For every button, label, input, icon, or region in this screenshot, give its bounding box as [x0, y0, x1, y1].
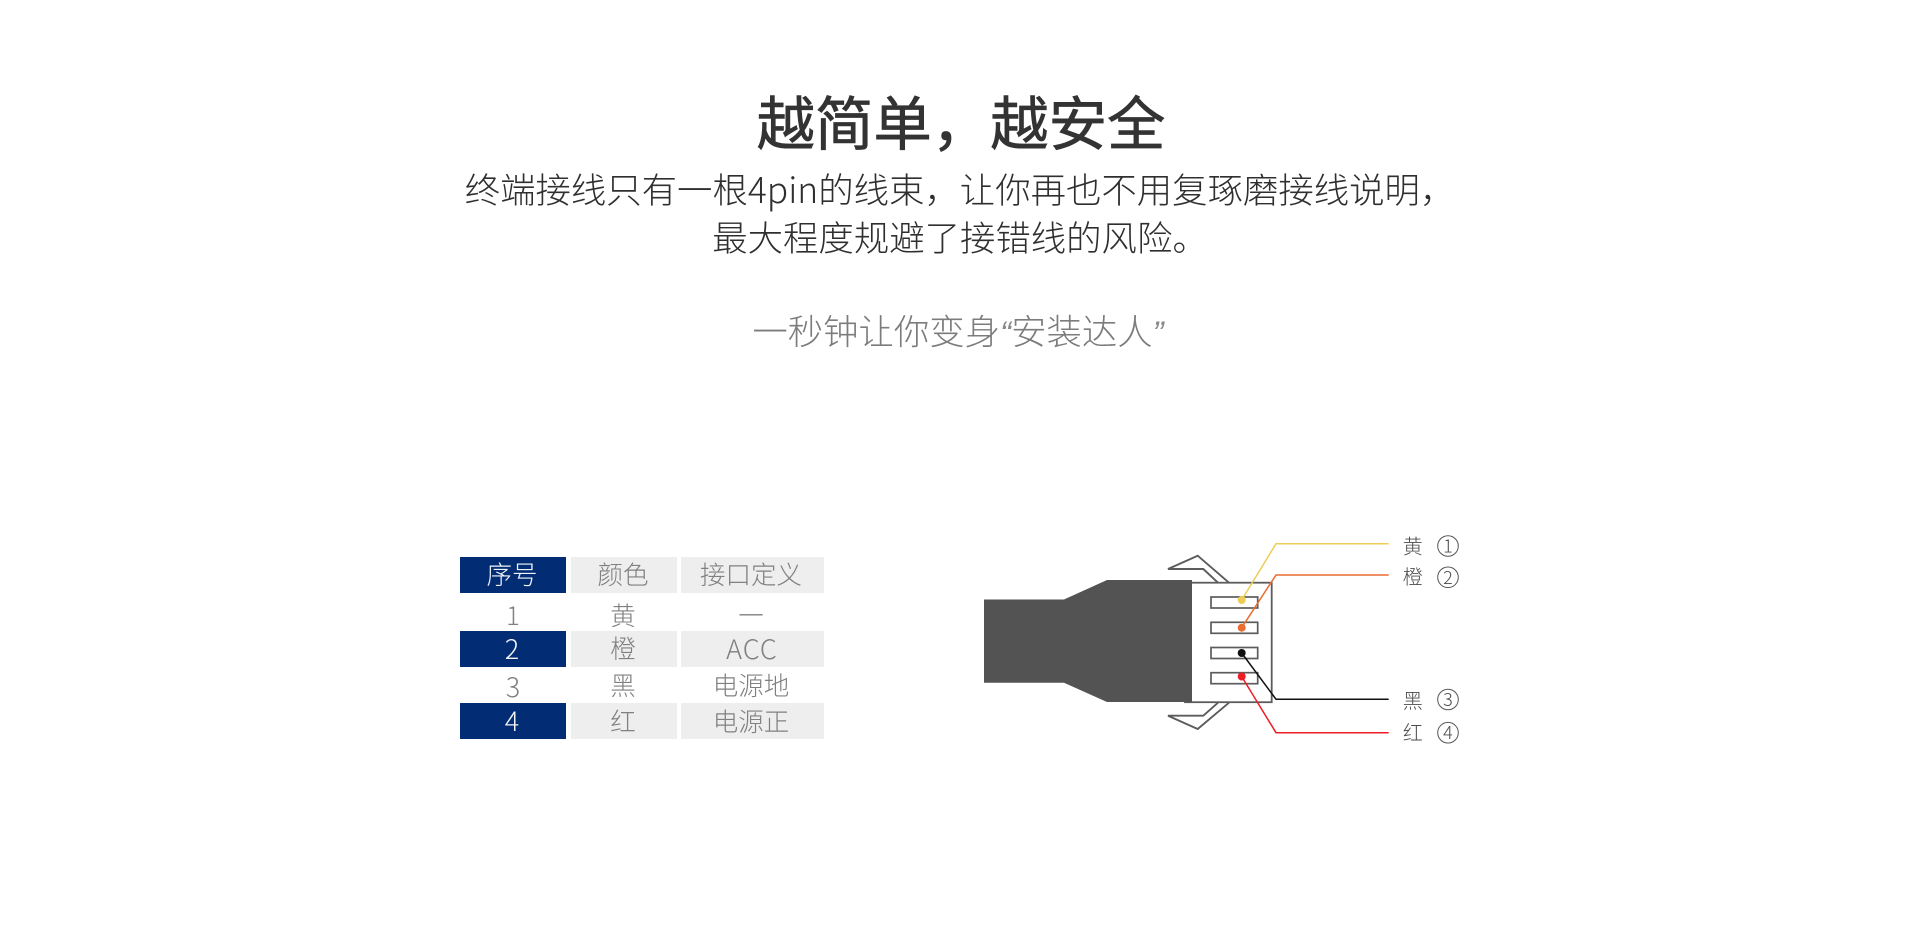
label: orange pin 2: 2: [1443, 564, 1453, 590]
header cell: interface definition: [681, 557, 824, 593]
yellow wire: [1238, 544, 1389, 604]
row 4: colour: 红: [610, 702, 636, 739]
red wire: [1238, 672, 1389, 733]
connector housing: [1185, 583, 1272, 702]
subtitle text block: 终端接线只有一根4pin的线束，让你再也不用复琢磨接线说明，: [465, 163, 1455, 214]
row 1: number: 1: [506, 596, 520, 633]
label: red pin 4: 红: [1403, 717, 1423, 746]
row 2: definition: [681, 631, 824, 667]
label: orange pin 2: 橙: [1403, 561, 1423, 590]
header cell: number: 序号: [486, 555, 538, 592]
row 4: number: 4: [505, 700, 519, 739]
black wire: [1238, 649, 1389, 699]
row 4: colour: [571, 703, 677, 739]
label: orange pin 2: [1403, 561, 1458, 590]
subtitle text block: 最大程度规避了接错线的风险。: [712, 211, 1208, 262]
label: red pin 4: [1403, 717, 1458, 746]
label: black pin 3: 黑: [1403, 685, 1423, 714]
connector latches: [1168, 556, 1229, 729]
row 4: definition: 电源正: [713, 702, 789, 739]
row 3: colour: 黑: [610, 666, 636, 703]
row 1: definition: 一: [738, 596, 764, 633]
row 3: definition: 电源地: [713, 666, 789, 703]
row 3: number: 3: [506, 666, 520, 704]
label: yellow pin 1: 黄: [1403, 531, 1423, 560]
pin slots: [1211, 597, 1258, 684]
header cell: colour: [571, 557, 677, 593]
title: 越简单，越安全: [757, 77, 1165, 162]
label: yellow pin 1: [1403, 531, 1458, 560]
header cell: colour: 颜色: [597, 555, 648, 592]
label: yellow pin 1: 1: [1443, 532, 1453, 558]
row 2: colour: 橙: [610, 629, 636, 666]
label: black pin 3: [1403, 685, 1458, 714]
row 1: colour: 黄: [610, 596, 636, 633]
header cell: interface definition: 接口定义: [700, 555, 802, 592]
label: black pin 3: 3: [1443, 686, 1453, 712]
row 2: number: [460, 631, 566, 667]
tagline: 一秒钟让你变身“安装达人”: [752, 304, 1164, 356]
header cell: number: [460, 557, 566, 593]
row 2: number: 2: [505, 628, 519, 667]
cable body: [984, 580, 1192, 702]
label: red pin 4: 4: [1443, 719, 1453, 745]
row 2: definition: ACC: [726, 628, 778, 667]
row 2: colour: [571, 631, 677, 667]
subtitle text block: [465, 163, 1455, 262]
row 4: definition: [681, 703, 824, 739]
orange wire: [1238, 575, 1389, 632]
row 4: number: [460, 703, 566, 739]
